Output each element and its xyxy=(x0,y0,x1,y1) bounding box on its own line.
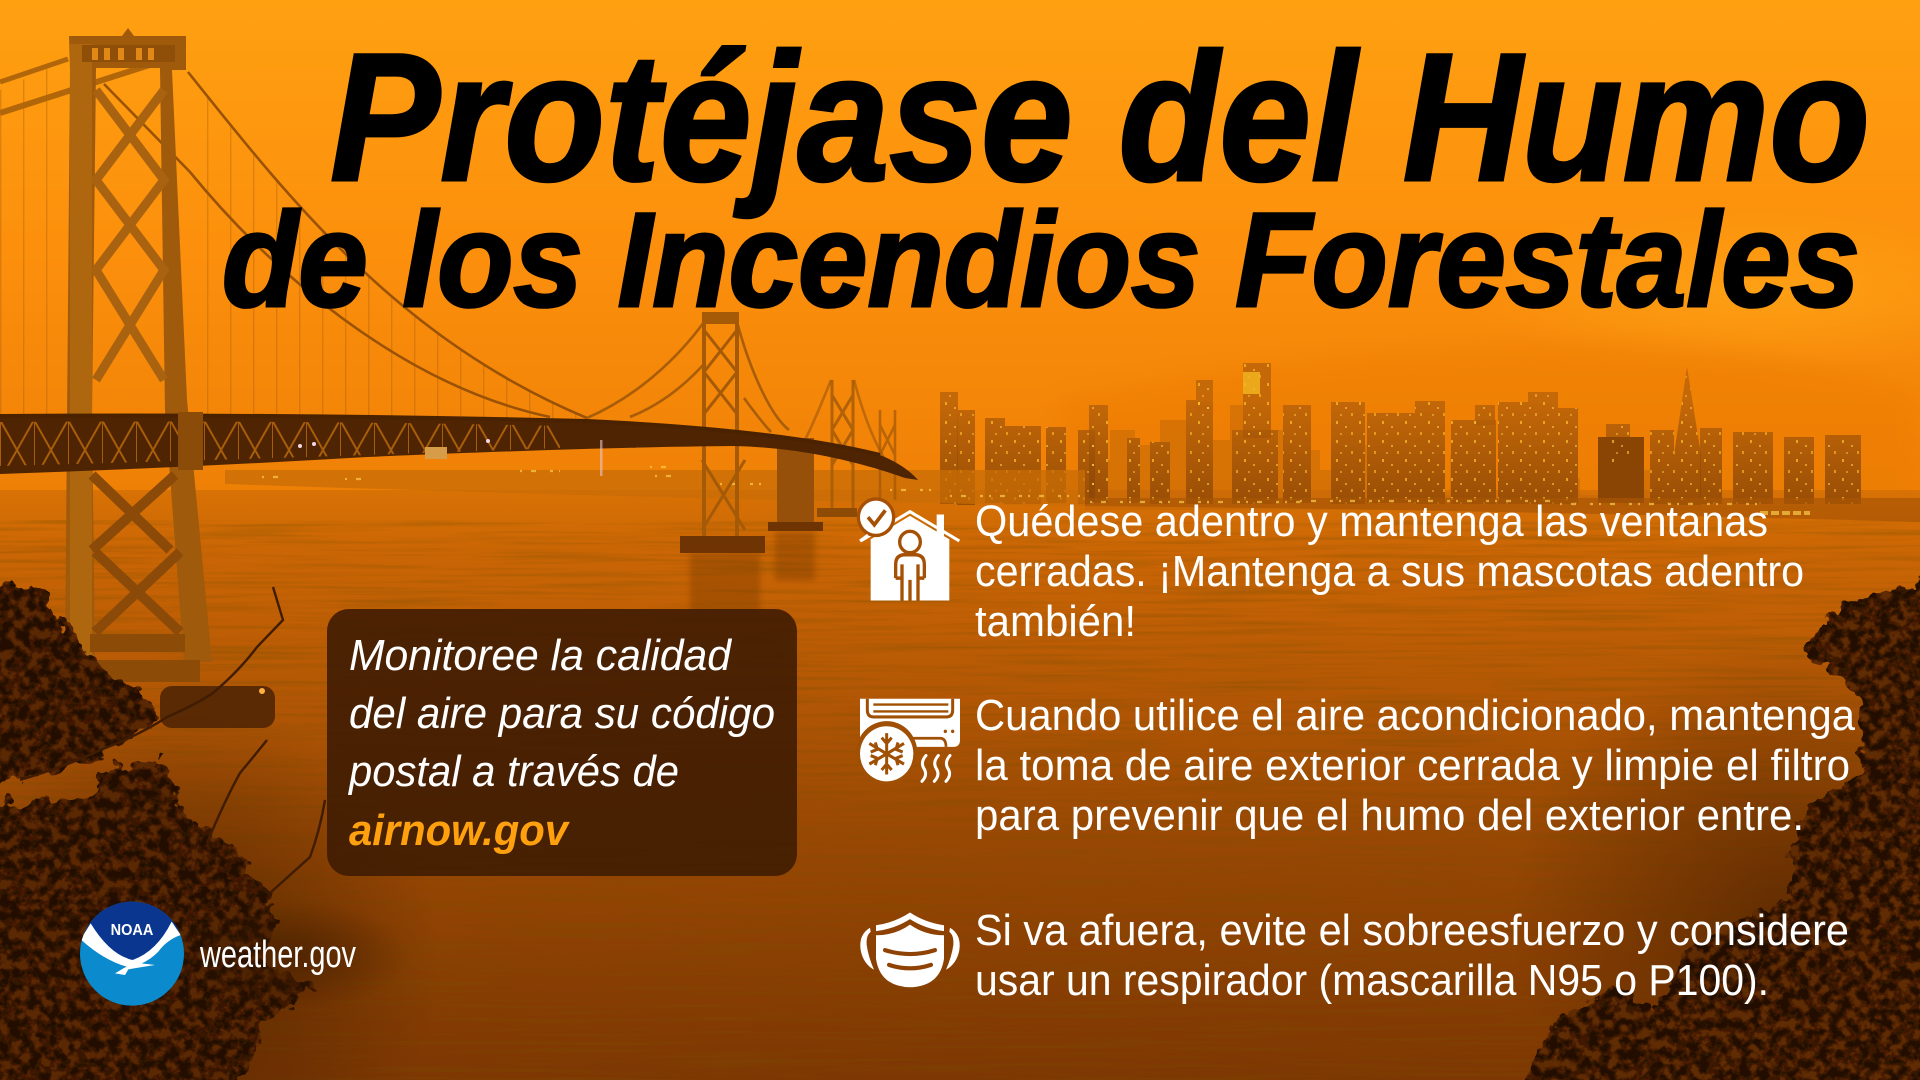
shade behind weather.gov xyxy=(170,900,410,1010)
advice text xyxy=(975,497,1855,1005)
bridge cables and suspenders xyxy=(0,59,892,470)
title xyxy=(222,15,1870,335)
logo wordmark: NOAA xyxy=(111,922,154,939)
far shoreline xyxy=(225,470,1085,506)
panel text: del aire para su código xyxy=(349,689,775,738)
tip 2: air conditioner xyxy=(975,691,1855,840)
left trees base xyxy=(0,570,340,1080)
panel text: Monitoree la calidad xyxy=(349,631,732,680)
tip 3: respirator: Si va afuera, evite el sobreesfuerzo y considere xyxy=(975,906,1849,955)
tip 1: stay indoors: también! xyxy=(975,597,1136,646)
panel text xyxy=(347,631,775,855)
skyline xyxy=(940,363,1861,510)
water reflections xyxy=(690,531,815,613)
smoke bank xyxy=(1060,342,1920,520)
icon: face mask xyxy=(860,913,960,987)
tip 2: air conditioner: Cuando utilice el aire acondicionado, mantenga xyxy=(975,691,1855,740)
NOAA logo xyxy=(80,902,184,1006)
tip 1: stay indoors: Quédese adentro y mantenga las ventanas xyxy=(975,497,1768,546)
icon: air conditioner xyxy=(856,699,960,784)
bare branches xyxy=(20,587,325,893)
shoreline lights xyxy=(262,467,1810,513)
panel text: airnow.gov xyxy=(349,806,570,855)
tower pier xyxy=(160,686,275,728)
tip 3: respirator xyxy=(975,906,1849,1005)
water xyxy=(0,490,1920,1080)
tip 3: respirator: usar un respirador (mascarilla N95 o P100). xyxy=(975,956,1769,1005)
callout panel: monitor air quality xyxy=(327,609,797,876)
far bridge tower lower sections and bases xyxy=(680,438,857,553)
logo circle xyxy=(80,902,184,1006)
tip 2: air conditioner: la toma de aire exterior cerrada y limpie el filtro xyxy=(975,741,1850,790)
left trees foliage xyxy=(0,570,340,1080)
main bridge tower xyxy=(65,28,275,728)
icon: house with person xyxy=(857,497,959,601)
panel background xyxy=(327,609,797,876)
far bridge towers xyxy=(702,312,895,536)
city waterfront xyxy=(1085,498,1920,522)
right trees base xyxy=(1500,570,1920,1080)
panel text: postal a través de xyxy=(347,747,679,796)
weather.gov label: weather.gov xyxy=(199,934,356,976)
right trees foliage xyxy=(1500,570,1920,1080)
tip 2: air conditioner: para prevenir que el humo del exterior entre. xyxy=(975,791,1804,840)
right tree shade xyxy=(1510,640,1920,1080)
tip 1: stay indoors xyxy=(975,497,1804,646)
logo navy upper xyxy=(84,902,180,960)
water ripples xyxy=(0,520,1920,1080)
cloud glow xyxy=(1460,205,1920,375)
bridge deck xyxy=(0,412,918,480)
tip 1: stay indoors: cerradas. ¡Mantenga a sus mascotas adentro xyxy=(975,547,1804,596)
sky xyxy=(0,0,1920,510)
left tree shade xyxy=(0,700,440,1080)
logo gull xyxy=(81,922,181,975)
